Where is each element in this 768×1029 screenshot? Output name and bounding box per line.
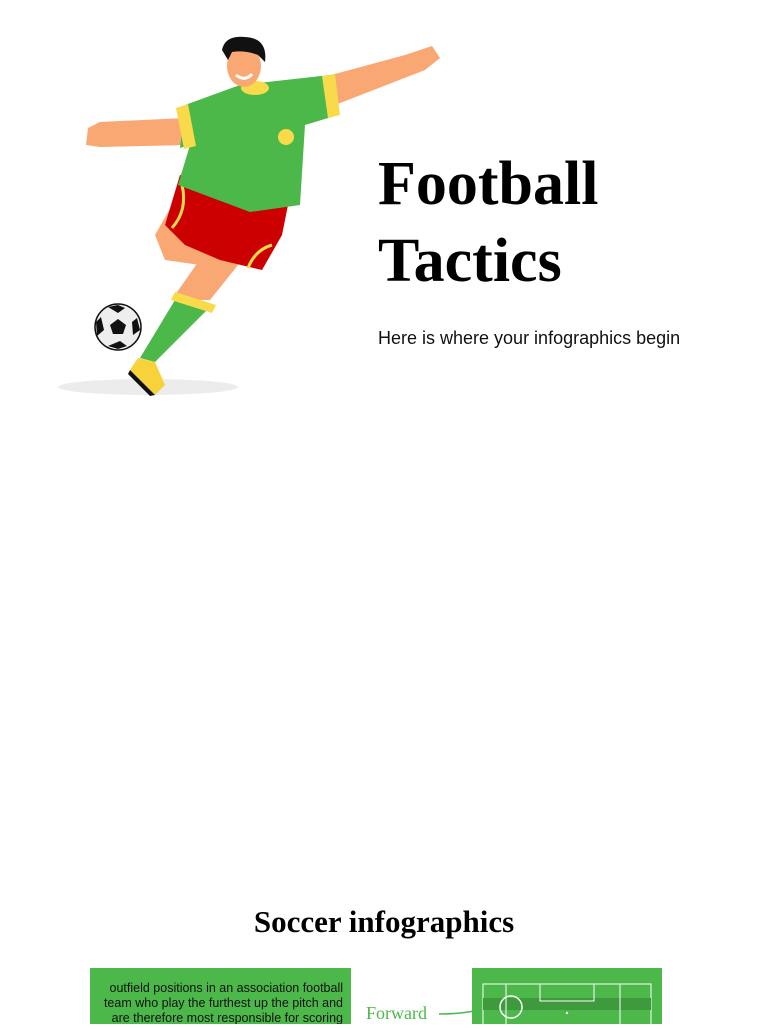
sock [140, 295, 212, 362]
shadow [58, 379, 238, 395]
panel: forward description [90, 968, 351, 1024]
title: Tactics [378, 227, 562, 295]
label: Forward with connector: Forward [366, 1003, 427, 1023]
title [378, 150, 598, 295]
shirt [178, 75, 338, 212]
boot [130, 358, 165, 395]
subtitle: Here is where your infographics begin [378, 328, 680, 348]
illustration: football player kicking ball [58, 36, 440, 396]
front leg [175, 245, 250, 300]
front arm [320, 46, 440, 105]
shorts [165, 175, 290, 270]
panel: forward description: team who play the furthest up the pitch and [104, 996, 343, 1010]
title: Football [378, 150, 598, 218]
back arm [86, 118, 188, 147]
label: Forward with connector [366, 1003, 472, 1023]
back leg thigh [155, 200, 210, 265]
ball [95, 304, 141, 350]
panel: forward description: outfield positions in an association football [110, 981, 343, 995]
pitch diagram [472, 968, 662, 1024]
section heading: Soccer infographics [254, 904, 514, 939]
head [227, 45, 261, 87]
